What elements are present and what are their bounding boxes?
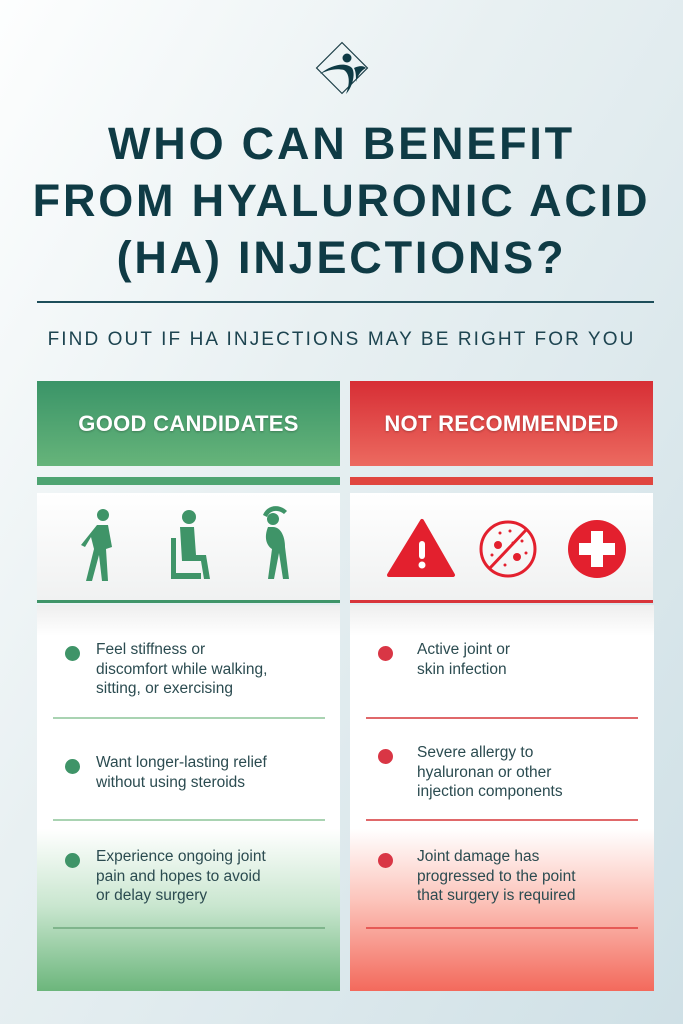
header: not recommended (350, 381, 653, 466)
logo (316, 42, 368, 94)
list: good candidates (37, 605, 340, 991)
list: not recommended: Active joint or (417, 641, 510, 658)
list: good candidates: without using steroids (96, 774, 245, 790)
list: not recommended: Joint damage has (417, 848, 539, 865)
item 3 (65, 848, 266, 904)
item 1 (65, 641, 267, 697)
list: not recommended: injection components (417, 783, 563, 800)
item 1 (378, 641, 510, 678)
item 2 (65, 754, 267, 790)
panel: good candidates (37, 381, 340, 991)
header: good candidates: GOOD CANDIDATES (78, 410, 299, 436)
list: not recommended: that surgery is required (417, 887, 576, 904)
title (33, 118, 650, 283)
list: good candidates: Feel stiffness or (96, 641, 205, 658)
list: not recommended (350, 605, 654, 991)
title: WHO CAN BENEFIT (108, 118, 575, 169)
icons: walk sit stretch (37, 493, 340, 603)
panel: not recommended (350, 381, 654, 991)
list: good candidates: or delay surgery (96, 887, 207, 904)
item 3 (378, 848, 576, 904)
list: not recommended: Severe allergy to (417, 744, 533, 761)
list: not recommended: hyaluronan or other (417, 764, 551, 780)
list: not recommended: skin infection (417, 660, 507, 678)
list: good candidates: sitting, or exercising (96, 680, 233, 697)
title: FROM HYALURONIC ACID (33, 175, 650, 226)
icons: warning, no germs, medical cross (350, 493, 653, 603)
header: good candidates (37, 381, 340, 466)
header: not recommended: NOT RECOMMENDED (384, 410, 619, 436)
list: good candidates: Experience ongoing joint (96, 848, 266, 865)
item 2 (378, 744, 563, 800)
subtitle: FIND OUT IF HA INJECTIONS MAY BE RIGHT FOR YOU (48, 329, 635, 350)
list: good candidates: discomfort while walking, (96, 660, 267, 678)
title: (HA) INJECTIONS? (117, 232, 566, 283)
list: good candidates: Want longer-lasting relief (96, 754, 267, 771)
list: good candidates: pain and hopes to avoid (96, 868, 261, 884)
list: not recommended: progressed to the point (417, 868, 576, 884)
